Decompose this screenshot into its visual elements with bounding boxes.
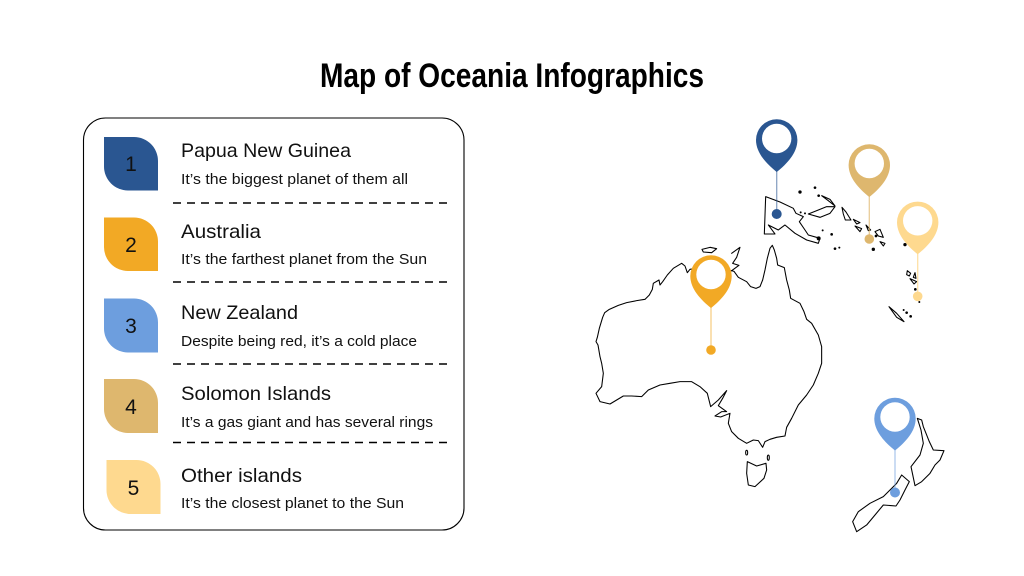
item 5: Other islands	[106, 460, 404, 514]
map: New Zealand	[853, 418, 944, 532]
map: Papua New Guinea and Pacific islands	[764, 186, 920, 322]
item 5: Other islands: 5	[128, 477, 139, 500]
item 2: Australia	[104, 218, 427, 271]
panel: country list	[84, 118, 464, 530]
pin: Solomon Islands	[849, 144, 890, 244]
item 5: Other islands: It’s the closest planet to the Sun	[181, 496, 404, 512]
item 4: Solomon Islands: It’s a gas giant and has several rings	[181, 415, 433, 431]
item 1: Papua New Guinea	[104, 137, 408, 190]
item 3: New Zealand: 3	[125, 315, 137, 338]
item 1: Papua New Guinea: 1	[125, 153, 137, 176]
item 2: Australia: 2	[125, 234, 137, 257]
item 4: Solomon Islands: 4	[125, 396, 137, 419]
pin: New Zealand	[874, 398, 916, 498]
map: Australia and Tasmania	[596, 245, 822, 487]
title: Map of Oceania Infographics	[320, 57, 704, 95]
item 2: Australia: Australia	[181, 221, 261, 243]
pin: Australia	[690, 255, 732, 355]
item 3: New Zealand: Despite being red, it’s a cold place	[181, 334, 417, 350]
pin: Other islands	[897, 202, 938, 301]
item 3: New Zealand: New Zealand	[181, 302, 298, 324]
item 1: Papua New Guinea: Papua New Guinea	[181, 140, 351, 162]
pin: Papua New Guinea	[756, 119, 797, 219]
item 2: Australia: It’s the farthest planet from the Sun	[181, 252, 427, 268]
item 3: New Zealand	[104, 298, 417, 352]
item 5: Other islands: Other islands	[181, 465, 302, 487]
item 1: Papua New Guinea: It’s the biggest planet of them all	[181, 172, 408, 188]
item 4: Solomon Islands	[104, 379, 433, 433]
item 4: Solomon Islands: Solomon Islands	[181, 383, 331, 405]
